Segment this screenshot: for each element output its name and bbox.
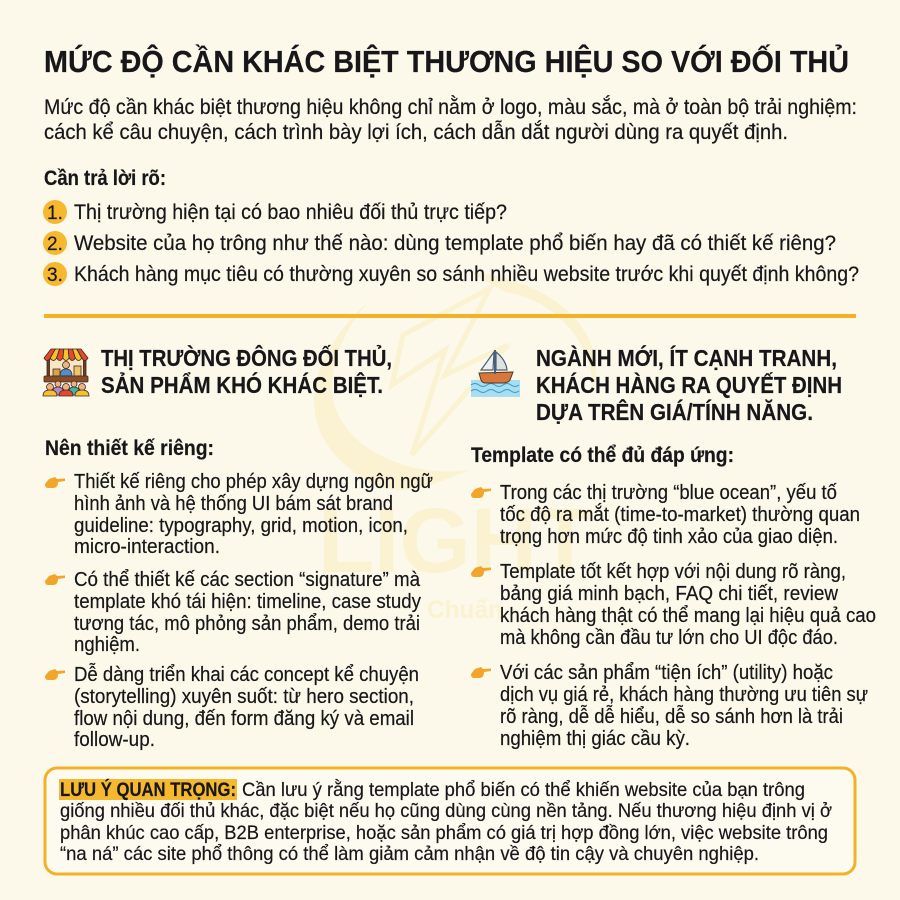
subheading: custom design: Nên thiết kế riêng: [45,437,214,460]
subheading: template: Template có thể đủ đáp ứng: [471,444,734,467]
numbered question list [43,200,859,286]
bullet 2: nghiệm. [74,634,140,656]
bullet 1: Thiết kế riêng cho phép xây dựng ngôn ngữ [74,471,433,493]
bullet 2 [471,561,876,649]
bullet 2: Có thể thiết kế các section “signature” mà [74,569,421,591]
bullet 1: Trong các thị trường “blue ocean”, yếu tố [500,482,837,504]
panel heading: crowded market: SẢN PHẨM KHÓ KHÁC BIỆT. [101,370,383,398]
watermark logo [314,272,596,624]
bullet 3: rõ ràng, dễ dễ hiểu, dễ so sánh hơn là trải [500,705,843,728]
bullet 1: guideline: typography, grid, motion, icon, [74,515,408,537]
question 1: Thị trường hiện tại có bao nhiêu đối thủ trực tiếp? [74,201,507,224]
bullet 2: khách hàng thật có thể mang lại hiệu quả cao [500,605,876,627]
bullet 3: flow nội dung, đến form đăng ký và email [74,708,414,730]
callout: important note: LƯU Ý QUAN TRỌNG: [60,777,236,801]
panel: new market [471,344,876,750]
bullet 3: Dễ dàng triển khai các concept kể chuyện [74,663,419,686]
icon: sailboat [471,350,520,397]
callout: important note: Cần lưu ý rằng template phổ biến có thể khiến website của bạn trông [242,778,805,801]
intro text: Mức độ cần khác biệt thương hiệu không chỉ nằm ở logo, màu sắc, mà ở toàn bộ trải nghiệm: [44,96,857,119]
bullet 3: dịch vụ giá rẻ, khách hàng thường ưu tiên sự [500,684,868,706]
panel heading: new market: KHÁCH HÀNG RA QUYẾT ĐỊNH [536,371,842,398]
bullet 1: hình ảnh và hệ thống UI bám sát brand [74,493,393,515]
title: MỨC ĐỘ CẦN KHÁC BIỆT THƯƠNG HIỆU SO VỚI ĐỐI THỦ [44,43,849,79]
bullet 3: nghiệm thị giác cầu kỳ. [500,728,690,750]
bullet 3 [45,663,419,751]
bullet 1 [45,471,433,558]
panel: crowded market [43,343,433,751]
bullet 2: template khó tái hiện: timeline, case study [74,591,421,613]
icon: market stall [43,349,89,396]
callout: important note [45,768,855,874]
question 3: Khách hàng mục tiêu có thường xuyên so sánh nhiều website trước khi quyết định không? [74,263,859,286]
intro text: cách kể câu chuyện, cách trình bày lợi ích, cách dẫn dắt người dùng ra quyết định. [44,121,788,144]
bullet 2: Template tốt kết hợp với nội dung rõ ràng, [500,561,846,583]
bullet 2: tương tác, mô phỏng sản phẩm, demo trải [74,613,420,635]
panel heading: new market: NGÀNH MỚI, ÍT CẠNH TRANH, [536,344,837,371]
bullet 2 [45,569,421,656]
bullet 3 [471,662,868,750]
intro text [44,96,857,144]
question 2: 2. [47,234,63,255]
callout: important note: “na ná” các site phổ thông có thể làm giảm cảm nhận về độ tin cậy và chuyên nghiệp. [60,843,759,865]
questions heading: Cần trả lời rõ: [44,167,166,190]
bullet 2: bảng giá minh bạch, FAQ chi tiết, review [500,583,839,605]
bullet 1: micro-interaction. [74,536,220,558]
question 2: Website của họ trông như thế nào: dùng template phổ biến hay đã có thiết kế riêng? [74,232,836,255]
bullet 1 [471,482,860,548]
bullet 3: follow-up. [74,729,155,751]
callout: important note: giống nhiều đối thủ khác, đặc biệt nếu họ cũng dùng cùng nền tảng. Nếu thương hiệu định vị ở [60,800,832,822]
bullet 3: Với các sản phẩm “tiện ích” (utility) hoặc [500,662,833,684]
bullet 1: trọng hơn mức độ tinh xảo của giao diện. [500,526,838,548]
panel heading: new market: DỰA TRÊN GIÁ/TÍNH NĂNG. [536,398,813,425]
watermark logo: LIGHT [318,490,593,592]
panel heading: crowded market [101,343,392,398]
callout: important note: phân khúc cao cấp, B2B enterprise, hoặc sản phẩm có giá trị hợp đồng lớn, việc website trông [60,822,828,844]
bullet 2: mà không cần đầu tư lớn cho UI độc đáo. [500,627,838,649]
watermark logo: Chuẩn [427,596,503,624]
question 1: 1. [47,203,63,224]
bullet 1: tốc độ ra mắt (time-to-market) thường quan [500,503,860,526]
panel heading: crowded market: THỊ TRƯỜNG ĐÔNG ĐỐI THỦ, [101,343,392,371]
panel heading: new market [536,344,842,425]
bullet 3: (storytelling) xuyên suốt: từ hero section, [74,686,414,708]
question 3: 3. [47,265,63,286]
